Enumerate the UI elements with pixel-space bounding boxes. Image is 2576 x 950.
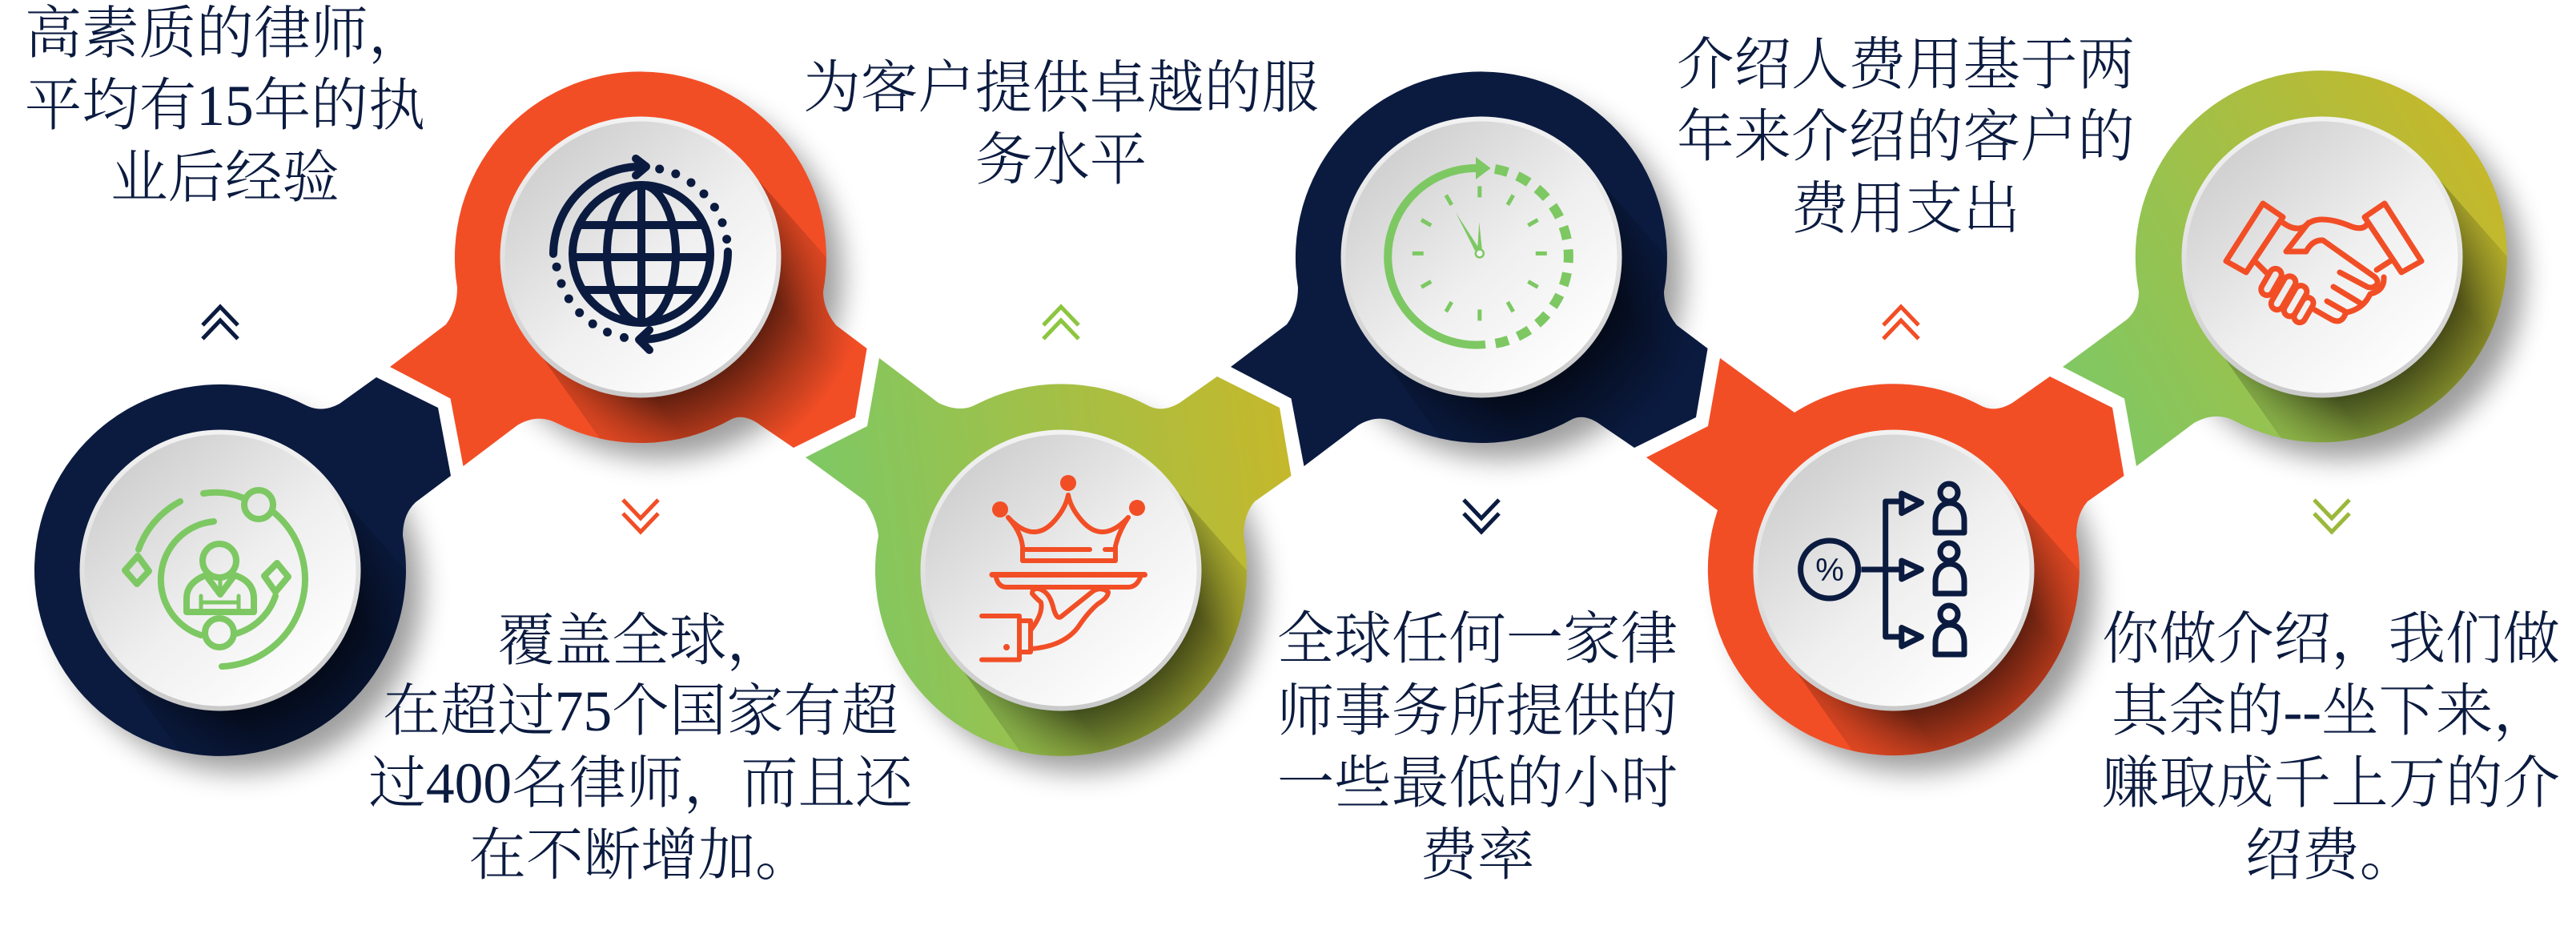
text block 2: 过400名律师，而且还 (368, 752, 913, 815)
icon: percent split to three people (1801, 484, 1964, 654)
text block 2: 在不断增加。 (468, 824, 813, 888)
text block 4: 费率 (1420, 824, 1535, 888)
text block 4: 师事务所提供的 (1277, 680, 1678, 743)
text block 1: 业后经验 (111, 147, 340, 210)
text block 3 (803, 57, 1319, 192)
arrow: down chevrons node 6 (2314, 500, 2349, 532)
icon: person with orbit (125, 490, 305, 666)
text block 6: 绍费。 (2245, 824, 2417, 888)
icon: percent split to three people: % (1815, 553, 1844, 588)
text block 1: 平均有15年的执 (25, 74, 425, 138)
text block 6: 其余的--坐下来， (2112, 680, 2550, 743)
node 5: orange referral percent (1646, 358, 2124, 756)
node 3: green crown on tray (806, 358, 1291, 756)
text block 4 (1277, 608, 1678, 888)
text block 3: 务水平 (975, 129, 1147, 192)
arrow: up chevrons node 1 (203, 307, 238, 339)
icon: handshake (2226, 203, 2421, 324)
text block 4: 一些最低的小时 (1277, 752, 1678, 815)
text block 1 (25, 2, 425, 210)
node 4: navy clock (1231, 71, 1708, 466)
icon: crown and serving tray (982, 475, 1145, 660)
node 2: orange globe (390, 71, 867, 466)
text block 5: 介绍人费用基于两 (1677, 34, 2135, 97)
arrow: up chevrons node 3 (1043, 307, 1079, 339)
text block 6 (2102, 608, 2560, 888)
text block 2: 覆盖全球， (497, 610, 784, 673)
arrow: down chevrons node 2 (623, 500, 658, 532)
text block 5: 费用支出 (1791, 178, 2020, 241)
icon: clock (1388, 157, 1569, 345)
arrow: down chevrons node 4 (1464, 500, 1499, 532)
node 1: navy person network (34, 377, 451, 756)
text block 5 (1677, 34, 2135, 241)
text block 1: 高素质的律师， (25, 2, 425, 66)
text block 5: 年来介绍的客户的 (1677, 106, 2135, 169)
text block 2: 在超过75个国家有超 (383, 680, 898, 743)
text block 2 (368, 610, 913, 888)
text block 6: 赚取成千上万的介 (2102, 752, 2560, 815)
icon: rotating globe (553, 159, 731, 350)
text block 3: 为客户提供卓越的服 (803, 57, 1319, 120)
text block 4: 全球任何一家律 (1277, 608, 1678, 671)
arrow: up chevrons node 5 (1883, 307, 1919, 339)
text block 6: 你做介绍，我们做 (2102, 608, 2560, 671)
node 6: green handshake (2063, 70, 2507, 466)
